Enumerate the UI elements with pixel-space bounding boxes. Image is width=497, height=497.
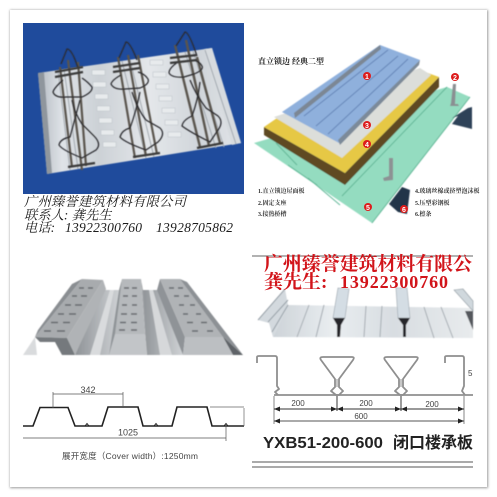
numbered markers: 4	[365, 142, 369, 149]
legend left	[258, 187, 305, 218]
dimension lines: 600	[354, 412, 368, 421]
yellow insulation board	[264, 72, 439, 173]
numbered markers	[363, 72, 459, 214]
truss 2	[111, 42, 163, 158]
legend right: 6.檩条	[415, 210, 432, 218]
red company text: 广州臻誉建筑材料有限公	[264, 253, 472, 275]
panel: standing seam roof diagram	[254, 45, 480, 223]
dimension lines: 5	[468, 369, 473, 378]
panel: truss deck photo	[23, 23, 244, 194]
height dimension	[210, 407, 244, 426]
truss 1	[53, 49, 99, 170]
numbered markers: 1	[365, 74, 369, 81]
contact text	[24, 194, 233, 235]
green profiled steel sheet	[254, 87, 470, 223]
rib tops	[35, 279, 103, 338]
red company text: 龚先生:	[264, 270, 327, 293]
numbered markers: 2	[453, 75, 457, 82]
deck photo	[23, 279, 243, 355]
seams	[294, 45, 381, 118]
blue photo background	[23, 23, 244, 194]
product caption: YXB51-200-600	[263, 435, 383, 452]
red company text: 13922300760	[340, 272, 448, 292]
legend right: 4.玻璃丝棉或挤塑泡沫板	[415, 187, 480, 195]
legend right	[415, 187, 480, 218]
panel: trapezoid deck 1025	[23, 279, 244, 461]
product caption	[263, 429, 473, 453]
dimension lines	[274, 369, 473, 424]
steel deck sheet	[38, 48, 241, 174]
numbered markers: 3	[365, 123, 369, 130]
cover width caption: 展开宽度（Cover width）:1250mm	[62, 451, 198, 461]
dimension 1025: 1025	[118, 428, 138, 438]
phone label: 电话:	[24, 220, 55, 235]
fixing brackets	[450, 84, 459, 106]
insulation side	[264, 77, 439, 185]
numbered markers: 5	[366, 205, 370, 212]
valleys	[75, 290, 120, 355]
legend left: 1.直立锁边屋面板	[258, 187, 305, 195]
product caption: 闭口楼承板	[393, 429, 473, 453]
phone number 1: 13922300760	[65, 220, 142, 235]
dimension 342: 342	[80, 385, 96, 395]
closed profile section	[257, 356, 473, 395]
heading: 直立锁边 经典二型	[258, 56, 324, 66]
white thermal layer	[274, 68, 431, 158]
blue roof panel	[282, 45, 420, 143]
top rule	[252, 255, 473, 257]
perforation slots	[44, 288, 213, 331]
legend left: 3.接热桥槽	[258, 210, 287, 218]
deck photo	[258, 288, 473, 338]
truss 3	[169, 32, 223, 148]
dimension 342	[53, 385, 123, 408]
purlins	[452, 107, 472, 129]
open ends	[23, 337, 37, 355]
numbered markers: 6	[402, 207, 406, 214]
bottom rules	[252, 462, 473, 467]
dimension lines: 200	[425, 400, 439, 409]
dimension lines: 200	[291, 399, 305, 408]
contact person: 联系人: 龚先生	[24, 208, 112, 222]
red company text	[264, 253, 472, 293]
dimension 1025	[23, 426, 226, 441]
rib webs	[67, 280, 106, 355]
cross section profile	[23, 407, 244, 426]
phone number 2: 13928705862	[156, 220, 233, 235]
legend left: 2.固定支座	[258, 199, 288, 207]
panel: closed deck YXB51-200-600	[252, 253, 473, 467]
legend right: 5.压型彩钢板	[415, 199, 450, 207]
dimension lines: 200	[359, 399, 373, 408]
company name: 广州臻誉建筑材料有限公司	[24, 194, 188, 209]
